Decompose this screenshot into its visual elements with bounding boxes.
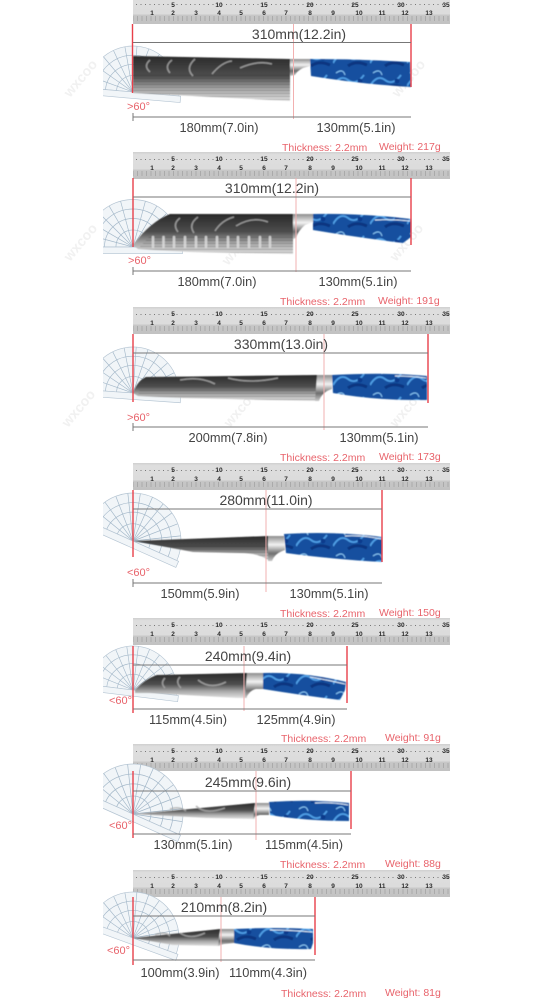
ruler: 11 bbox=[379, 320, 386, 327]
ruler: 13 bbox=[425, 883, 433, 890]
ruler: 25 bbox=[351, 622, 359, 629]
ruler: 8 bbox=[308, 631, 312, 638]
ruler bbox=[133, 618, 450, 645]
total length: 210mm(8.2in) bbox=[181, 899, 267, 915]
ruler: 10 bbox=[215, 156, 223, 163]
ruler: 30 bbox=[397, 874, 405, 881]
specifications: Weight: 217g bbox=[379, 141, 441, 153]
blade and handle length: 115mm(4.5in) bbox=[149, 712, 227, 727]
specifications bbox=[281, 732, 441, 745]
total length: 245mm(9.6in) bbox=[205, 774, 291, 790]
ruler: 35 bbox=[442, 874, 450, 881]
ruler bbox=[133, 307, 450, 334]
ruler: 30 bbox=[397, 467, 405, 474]
ruler: 3 bbox=[194, 10, 198, 17]
protractor bbox=[103, 646, 179, 702]
ruler: 35 bbox=[442, 748, 450, 755]
ruler: 3 bbox=[194, 757, 198, 764]
ruler: 5 bbox=[171, 467, 175, 474]
total length: 310mm(12.2in) bbox=[225, 180, 319, 196]
watermarks: wxcoo bbox=[57, 386, 98, 431]
ruler: 10 bbox=[355, 320, 363, 327]
ruler: 8 bbox=[308, 757, 312, 764]
ruler: 10 bbox=[215, 311, 223, 318]
specifications: Weight: 150g bbox=[379, 607, 441, 619]
ruler: 9 bbox=[331, 631, 335, 638]
specifications bbox=[280, 858, 441, 871]
protractor bbox=[103, 764, 184, 842]
ruler: 7 bbox=[284, 165, 288, 172]
specifications: Weight: 173g bbox=[379, 451, 441, 463]
ruler: 5 bbox=[239, 476, 243, 483]
ruler: 2 bbox=[171, 757, 175, 764]
angle label: <60° bbox=[109, 820, 132, 832]
ruler: 2 bbox=[171, 165, 175, 172]
ruler: 5 bbox=[171, 874, 175, 881]
blade and handle length: 130mm(5.1in) bbox=[290, 586, 368, 601]
ruler: 20 bbox=[306, 2, 314, 9]
ruler: 13 bbox=[425, 320, 433, 327]
ruler: 11 bbox=[379, 631, 386, 638]
ruler: 7 bbox=[284, 631, 288, 638]
ruler: 12 bbox=[401, 883, 409, 890]
ruler: 15 bbox=[260, 748, 268, 755]
blade and handle length bbox=[133, 579, 382, 601]
knife bbox=[135, 673, 346, 700]
ruler: 13 bbox=[425, 476, 433, 483]
ruler: 10 bbox=[355, 476, 363, 483]
ruler: 2 bbox=[171, 883, 175, 890]
ruler: 4 bbox=[217, 631, 221, 638]
protractor bbox=[103, 46, 181, 103]
ruler: 10 bbox=[355, 10, 363, 17]
ruler: 30 bbox=[397, 311, 405, 318]
specifications: Thickness: 2.2mm bbox=[282, 142, 367, 154]
angle label: <60° bbox=[107, 945, 130, 957]
blade and handle length: 130mm(5.1in) bbox=[340, 430, 418, 445]
protractor bbox=[103, 492, 182, 568]
ruler: 5 bbox=[239, 10, 243, 17]
blade and handle length: 180mm(7.0in) bbox=[180, 120, 258, 135]
ruler: 25 bbox=[351, 467, 359, 474]
ruler: 30 bbox=[397, 2, 405, 9]
knife bbox=[133, 928, 313, 949]
specifications: Thickness: 2.2mm bbox=[280, 452, 365, 464]
ruler: 12 bbox=[401, 757, 409, 764]
ruler: 10 bbox=[215, 748, 223, 755]
ruler: 10 bbox=[355, 757, 363, 764]
ruler: 4 bbox=[217, 476, 221, 483]
ruler: 13 bbox=[425, 165, 433, 172]
ruler bbox=[133, 870, 450, 897]
ruler: 25 bbox=[351, 156, 359, 163]
blade and handle length: 130mm(5.1in) bbox=[154, 837, 232, 852]
specifications: Weight: 91g bbox=[385, 732, 441, 744]
protractor bbox=[103, 346, 181, 404]
ruler: 5 bbox=[239, 757, 243, 764]
watermarks: wxcoo bbox=[59, 220, 100, 265]
ruler: 15 bbox=[260, 467, 268, 474]
blade and handle length: 100mm(3.9in) bbox=[141, 965, 219, 980]
ruler: 2 bbox=[171, 476, 175, 483]
watermarks: wxcoo bbox=[385, 220, 426, 265]
blade and handle length: 130mm(5.1in) bbox=[319, 274, 397, 289]
ruler: 6 bbox=[262, 320, 266, 327]
ruler: 5 bbox=[239, 165, 243, 172]
ruler: 10 bbox=[355, 631, 363, 638]
ruler: 1 bbox=[150, 476, 154, 483]
ruler: 15 bbox=[260, 156, 268, 163]
ruler: 35 bbox=[442, 2, 450, 9]
ruler: 13 bbox=[425, 757, 433, 764]
ruler: 9 bbox=[331, 757, 335, 764]
specifications: Weight: 88g bbox=[385, 858, 441, 870]
total length: 310mm(12.2in) bbox=[252, 26, 346, 42]
angle label: <60° bbox=[127, 567, 150, 579]
ruler: 10 bbox=[355, 165, 363, 172]
ruler: 1 bbox=[150, 883, 154, 890]
ruler: 3 bbox=[194, 631, 198, 638]
ruler: 4 bbox=[217, 320, 221, 327]
ruler: 7 bbox=[284, 10, 288, 17]
blade and handle length bbox=[133, 960, 315, 980]
ruler: 5 bbox=[171, 311, 175, 318]
blade and handle length bbox=[133, 709, 347, 727]
knife bbox=[133, 214, 411, 254]
ruler: 4 bbox=[217, 883, 221, 890]
ruler: 30 bbox=[397, 622, 405, 629]
panel: knife 7 paring bbox=[88, 870, 450, 1000]
ruler: 9 bbox=[331, 476, 335, 483]
ruler: 5 bbox=[171, 622, 175, 629]
ruler: 9 bbox=[331, 320, 335, 327]
ruler: 6 bbox=[262, 10, 266, 17]
blade and handle length bbox=[133, 423, 428, 445]
ruler: 2 bbox=[171, 10, 175, 17]
knife bbox=[134, 533, 382, 562]
ruler: 5 bbox=[239, 883, 243, 890]
blade and handle length: 125mm(4.9in) bbox=[257, 712, 335, 727]
blade and handle length bbox=[133, 834, 351, 852]
ruler: 3 bbox=[194, 476, 198, 483]
ruler: 4 bbox=[217, 757, 221, 764]
protractor bbox=[103, 199, 183, 254]
ruler: 8 bbox=[308, 165, 312, 172]
blade and handle length bbox=[133, 267, 411, 289]
total length: 330mm(13.0in) bbox=[234, 336, 328, 352]
watermarks: wxcoo bbox=[387, 56, 428, 101]
ruler: 9 bbox=[331, 883, 335, 890]
knife bbox=[135, 801, 349, 821]
ruler: 12 bbox=[401, 320, 409, 327]
knife bbox=[133, 56, 411, 101]
angle label: <60° bbox=[109, 695, 132, 707]
ruler: 20 bbox=[306, 748, 314, 755]
ruler: 9 bbox=[331, 10, 335, 17]
specifications: Thickness: 2.2mm bbox=[281, 988, 366, 1000]
ruler: 12 bbox=[401, 631, 409, 638]
ruler: 35 bbox=[442, 156, 450, 163]
ruler: 1 bbox=[150, 757, 154, 764]
ruler: 11 bbox=[379, 757, 386, 764]
specifications: Thickness: 2.2mm bbox=[280, 859, 365, 871]
ruler: 15 bbox=[260, 311, 268, 318]
ruler: 15 bbox=[260, 622, 268, 629]
panel: knife 3 bread bbox=[87, 307, 450, 464]
ruler: 11 bbox=[379, 165, 386, 172]
ruler: 6 bbox=[262, 631, 266, 638]
ruler: 5 bbox=[171, 156, 175, 163]
blade and handle length: 180mm(7.0in) bbox=[178, 274, 256, 289]
ruler: 20 bbox=[306, 622, 314, 629]
ruler: 7 bbox=[284, 883, 288, 890]
angle label: >60° bbox=[127, 101, 150, 113]
panel: knife 6 utility bbox=[84, 744, 450, 871]
ruler: 15 bbox=[260, 874, 268, 881]
blade and handle length: 200mm(7.8in) bbox=[189, 430, 267, 445]
ruler: 3 bbox=[194, 165, 198, 172]
watermarks: wxcoo bbox=[219, 386, 260, 431]
ruler: 13 bbox=[425, 10, 433, 17]
ruler: 7 bbox=[284, 476, 288, 483]
ruler: 25 bbox=[351, 311, 359, 318]
ruler: 4 bbox=[217, 10, 221, 17]
ruler: 6 bbox=[262, 165, 266, 172]
watermarks: wxcoo bbox=[385, 386, 426, 431]
ruler: 5 bbox=[239, 320, 243, 327]
total length: 280mm(11.0in) bbox=[219, 492, 313, 508]
total length: 240mm(9.4in) bbox=[205, 648, 291, 664]
specifications bbox=[280, 295, 440, 308]
ruler bbox=[133, 152, 450, 179]
ruler: 35 bbox=[442, 311, 450, 318]
ruler: 4 bbox=[217, 165, 221, 172]
ruler: 15 bbox=[260, 2, 268, 9]
ruler: 25 bbox=[351, 2, 359, 9]
ruler: 12 bbox=[401, 10, 409, 17]
panel: knife 5 small santoku bbox=[89, 618, 450, 745]
panel: knife 2 santoku bbox=[86, 152, 450, 308]
ruler: 3 bbox=[194, 883, 198, 890]
ruler: 11 bbox=[379, 883, 386, 890]
ruler: 25 bbox=[351, 874, 359, 881]
ruler: 1 bbox=[150, 631, 154, 638]
protractor bbox=[103, 892, 179, 961]
ruler: 5 bbox=[239, 631, 243, 638]
ruler bbox=[133, 0, 450, 24]
ruler: 30 bbox=[397, 748, 405, 755]
blade and handle length: 150mm(5.9in) bbox=[161, 586, 239, 601]
ruler: 7 bbox=[284, 320, 288, 327]
ruler: 2 bbox=[171, 631, 175, 638]
panel: knife 4 boning bbox=[86, 463, 450, 620]
knife bbox=[133, 374, 427, 401]
specifications bbox=[281, 987, 441, 1000]
specifications: Thickness: 2.2mm bbox=[280, 296, 365, 308]
ruler: 6 bbox=[262, 883, 266, 890]
blade and handle length: 130mm(5.1in) bbox=[317, 120, 395, 135]
ruler: 8 bbox=[308, 320, 312, 327]
watermarks bbox=[57, 56, 428, 431]
ruler: 20 bbox=[306, 467, 314, 474]
blade and handle length: 110mm(4.3in) bbox=[229, 965, 307, 980]
ruler: 25 bbox=[351, 748, 359, 755]
ruler: 1 bbox=[150, 320, 154, 327]
specifications: Weight: 81g bbox=[385, 987, 441, 999]
specifications: Thickness: 2.2mm bbox=[280, 608, 365, 620]
ruler: 1 bbox=[150, 10, 154, 17]
blade and handle length bbox=[133, 113, 411, 135]
ruler: 10 bbox=[215, 622, 223, 629]
ruler: 11 bbox=[379, 10, 386, 17]
ruler: 10 bbox=[215, 2, 223, 9]
blade and handle length: 115mm(4.5in) bbox=[265, 837, 343, 852]
ruler: 5 bbox=[171, 2, 175, 9]
ruler: 30 bbox=[397, 156, 405, 163]
angle label: >60° bbox=[128, 255, 151, 267]
ruler: 35 bbox=[442, 467, 450, 474]
ruler: 20 bbox=[306, 311, 314, 318]
angle label: >60° bbox=[127, 412, 150, 424]
ruler: 5 bbox=[171, 748, 175, 755]
ruler: 3 bbox=[194, 320, 198, 327]
ruler: 9 bbox=[331, 165, 335, 172]
specifications bbox=[280, 607, 441, 620]
ruler: 12 bbox=[401, 476, 409, 483]
ruler: 10 bbox=[215, 467, 223, 474]
ruler: 11 bbox=[379, 476, 386, 483]
ruler: 20 bbox=[306, 874, 314, 881]
ruler: 10 bbox=[355, 883, 363, 890]
specifications bbox=[280, 451, 441, 464]
ruler: 10 bbox=[215, 874, 223, 881]
specifications: Thickness: 2.2mm bbox=[281, 733, 366, 745]
ruler: 6 bbox=[262, 476, 266, 483]
panel: knife 1 cleaver bbox=[87, 0, 450, 154]
watermarks: wxcoo bbox=[59, 56, 100, 101]
ruler: 1 bbox=[150, 165, 154, 172]
ruler: 8 bbox=[308, 476, 312, 483]
ruler: 6 bbox=[262, 757, 266, 764]
ruler: 8 bbox=[308, 883, 312, 890]
ruler: 8 bbox=[308, 10, 312, 17]
ruler bbox=[133, 463, 450, 490]
specifications: Weight: 191g bbox=[378, 295, 440, 307]
ruler: 13 bbox=[425, 631, 433, 638]
ruler bbox=[133, 744, 450, 771]
specifications bbox=[282, 141, 441, 154]
ruler: 12 bbox=[401, 165, 409, 172]
ruler: 20 bbox=[306, 156, 314, 163]
watermarks: wxcoo bbox=[217, 224, 258, 269]
ruler: 2 bbox=[171, 320, 175, 327]
ruler: 7 bbox=[284, 757, 288, 764]
ruler: 35 bbox=[442, 622, 450, 629]
